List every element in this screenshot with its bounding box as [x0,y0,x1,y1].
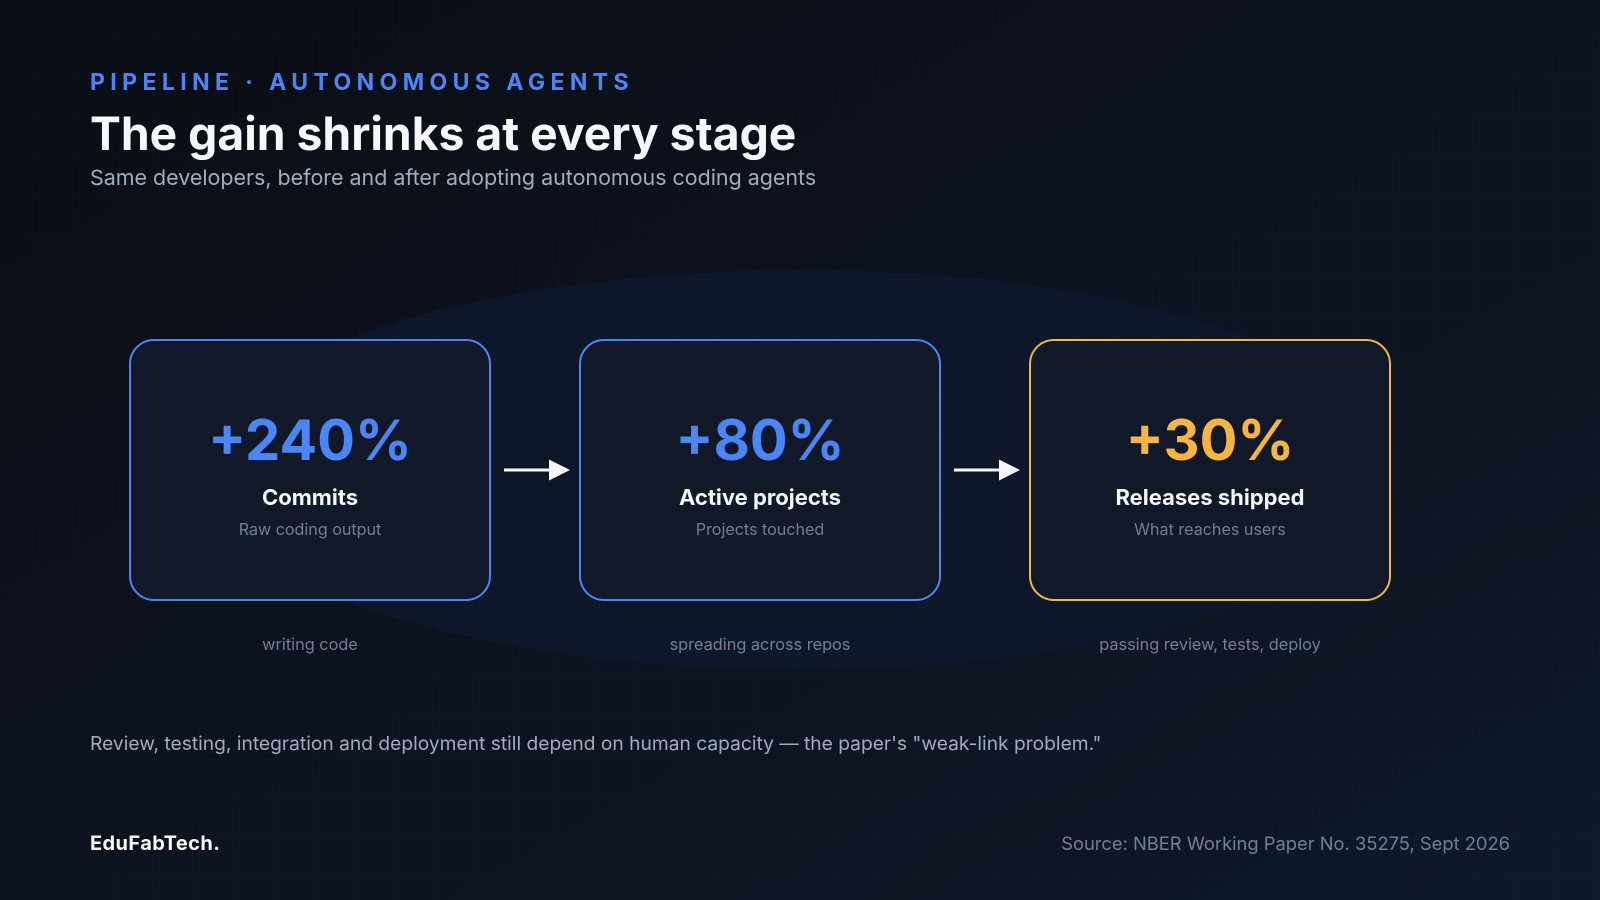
releases value: +30% [1126,406,1294,474]
brand: EduFabTech. [90,831,220,855]
commits description: Raw coding output [239,519,381,539]
note: passing review: passing review, tests, deploy [1099,634,1321,654]
panel: releases shipped [1029,339,1391,601]
releases description: What reaches users [1134,519,1286,539]
active projects description: Projects touched [696,519,824,539]
source: Source: NBER Working Paper No. 35275, Sept 2026 [1061,833,1510,855]
takeaway text: Review, testing, integration and deployment still depend on human capacity — the paper's "weak-link problem." [90,731,1102,755]
note: writing code: writing code [262,634,358,654]
active projects label: Active projects [679,485,841,511]
panel: active projects [579,339,941,601]
title: The gain shrinks at every stage [90,106,796,162]
panel: commits [129,339,491,601]
commits value: +240% [208,406,412,474]
eyebrow: PIPELINE · AUTONOMOUS AGENTS [90,68,634,96]
active projects value: +80% [675,406,845,474]
commits label: Commits [262,485,358,511]
note: spreading across repos: spreading across repos [670,634,850,654]
subtitle: Same developers, before and after adopting autonomous coding agents [90,165,816,191]
releases label: Releases shipped [1116,485,1304,511]
